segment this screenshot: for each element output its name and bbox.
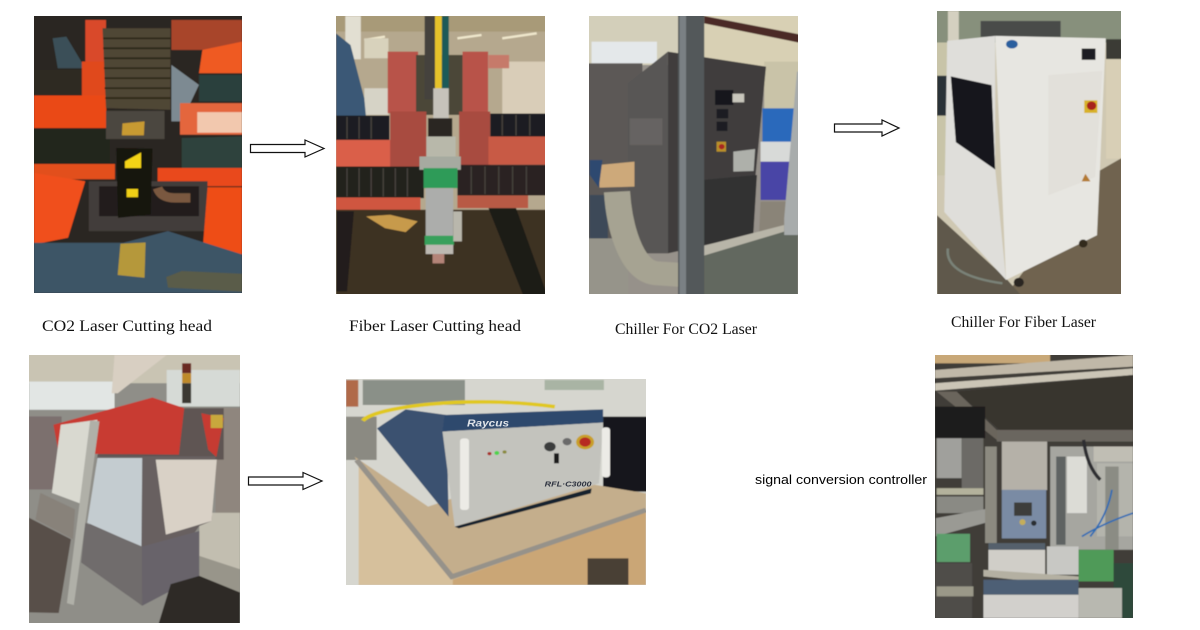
caption: fiber laser cutting head: Fiber Laser Cutting head: [349, 318, 521, 335]
photo: CO2 laser source: [12, 343, 256, 630]
photo: chiller for fiber laser: [926, 0, 1133, 302]
photo: Raycus fiber laser source: RFL·C3000: [545, 480, 592, 488]
photo: Raycus fiber laser source: Raycus: [467, 419, 509, 429]
arrow: head conversion: [250, 140, 324, 157]
caption: CO2 laser cutting head: CO2 Laser Cutting head: [42, 318, 212, 335]
photo: chiller for CO2 laser: [570, 0, 821, 312]
label: signal conversion controller: signal conversion controller: [755, 472, 928, 487]
caption: chiller for CO2 laser: Chiller For CO2 Laser: [615, 321, 758, 338]
photo: CO2 laser cutting head: [0, 0, 309, 351]
photo: signal conversion controller cabinet: [923, 343, 1144, 630]
caption: chiller for fiber laser: Chiller For Fiber Laser: [951, 314, 1097, 331]
arrow: laser source conversion: [248, 472, 322, 490]
photo: fiber laser cutting head: [316, 0, 568, 315]
arrow: chiller conversion: [834, 120, 899, 136]
photo: Raycus fiber laser source: [330, 370, 661, 597]
